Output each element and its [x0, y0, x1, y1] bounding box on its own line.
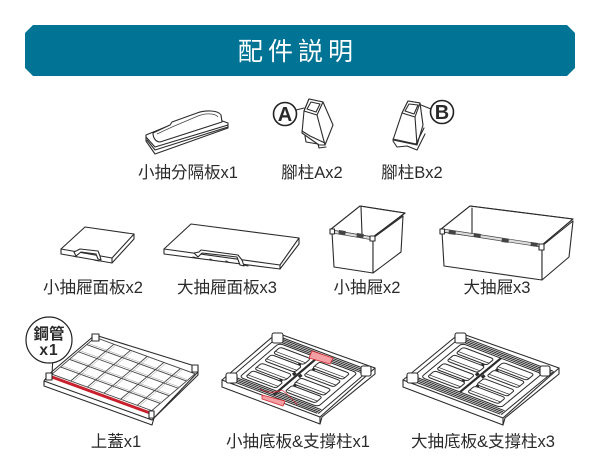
item: foot post B: 腳柱Bx2: [381, 163, 443, 182]
callout: steel tube x1: 鋼管: [33, 324, 65, 343]
item: top cover with steel tube: [26, 317, 198, 451]
item: large drawer box: 大抽屜x3: [464, 278, 530, 297]
item: large drawer base with support posts: [403, 333, 559, 451]
callout: steel tube x1: x1: [39, 342, 59, 359]
steel tube highlight: [52, 377, 150, 413]
item: foot post B: [381, 100, 454, 182]
title banner: 配件説明: [238, 38, 358, 66]
item: small drawer front panel: [43, 227, 143, 297]
item: small drawer box: 小抽屜x2: [334, 278, 400, 297]
item: large drawer box: [440, 206, 573, 297]
item: foot post A: [274, 99, 343, 182]
item: top cover with steel tube: 上蓋x1: [91, 432, 141, 451]
item: large drawer base with support posts: 大抽底板&支撐柱x3: [411, 432, 555, 451]
item: small drawer base with support posts: 小抽底板&支撐柱x1: [226, 432, 370, 451]
item: small drawer divider: [138, 111, 238, 182]
callout: steel tube x1: [26, 317, 72, 363]
item: foot post A: 腳柱Ax2: [281, 163, 343, 182]
item: large drawer front panel: 大抽屜面板x3: [177, 278, 277, 297]
item: large drawer front panel: [164, 224, 299, 297]
support post highlights: [260, 351, 333, 406]
icon: letter B badge: B: [435, 102, 449, 124]
item: small drawer front panel: 小抽屜面板x2: [43, 278, 143, 297]
item: small drawer base with support posts: [222, 333, 375, 451]
item: small drawer divider: 小抽分隔板x1: [138, 163, 238, 182]
title banner: [25, 25, 575, 76]
icon: letter A badge: A: [278, 104, 292, 126]
item: small drawer box: [330, 206, 405, 297]
